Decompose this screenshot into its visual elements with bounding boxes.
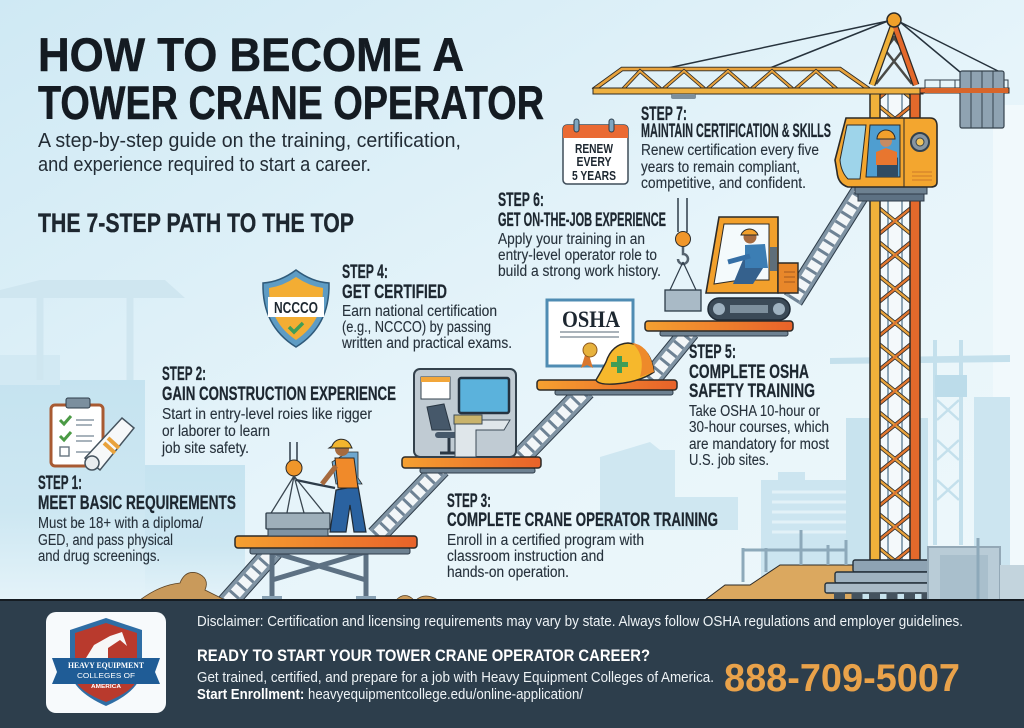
step 2 text: STEP 2:: [162, 364, 206, 385]
operator cab: [835, 118, 937, 201]
icon: calendar: RENEW: [575, 141, 614, 156]
step 6 text: GET ON-THE-JOB EXPERIENCE: [498, 210, 666, 231]
icon: NCCCO shield: NCCCO: [274, 300, 318, 317]
step 2 text: or laborer to learn: [162, 423, 270, 440]
excavator cab: [706, 217, 798, 320]
subtitle: and experience required to start a career.: [38, 154, 371, 176]
step 7 text: [641, 104, 831, 192]
enrollment link: Start Enrollment: heavyequipmentcollege.edu/online-application/: [197, 686, 584, 703]
step 1 text: Must be 18+ with a diploma/: [38, 515, 204, 532]
jib: [593, 69, 1009, 99]
step 2 text: GAIN CONSTRUCTION EXPERIENCE: [162, 384, 396, 405]
step 3 text: classroom instruction and: [447, 548, 604, 565]
step 5 text: U.S. job sites.: [689, 452, 769, 469]
dirt mounds: [140, 572, 438, 600]
step 2 text: job site safety.: [161, 440, 249, 457]
platform 3: [537, 380, 677, 395]
step 7 text: years to remain compliant,: [641, 159, 800, 176]
step 7 text: STEP 7:: [641, 104, 687, 125]
platform 2: [402, 457, 541, 473]
platform 4: [645, 321, 793, 336]
subtitle: [38, 130, 461, 176]
step 5 text: COMPLETE OSHA: [689, 362, 809, 383]
call to action text: Get trained, certified, and prepare for a job with Heavy Equipment Colleges of America.: [197, 669, 714, 686]
step 5 text: [689, 342, 830, 469]
step 7 text: competitive, and confident.: [641, 175, 806, 192]
title: [38, 28, 544, 129]
step 3 text: COMPLETE CRANE OPERATOR TRAINING: [447, 510, 718, 531]
step 7 text: Renew certification every five: [641, 142, 819, 159]
step 6 text: [498, 190, 666, 280]
worker with hook and load: [266, 439, 366, 536]
icon: hard hat: [596, 343, 654, 384]
step 6 text: STEP 6:: [498, 190, 544, 211]
logo: HEAVY EQUIPMENT: [68, 660, 144, 670]
hook and load: [665, 198, 701, 311]
mast: [870, 13, 920, 560]
phone number: 888-709-5007: [724, 657, 960, 700]
tower crane: [593, 13, 1024, 600]
step 6 text: build a strong work history.: [498, 263, 661, 280]
certificate: OSHA: [562, 307, 620, 332]
counterweight: [925, 71, 1008, 128]
icon: clipboard and diploma: [51, 398, 134, 470]
step 3 text: hands-on operation.: [447, 564, 569, 581]
logo: AMERICA: [91, 684, 121, 690]
step 5 text: 30-hour courses, which: [689, 419, 829, 436]
step 1 text: GED, and pass physical: [38, 532, 173, 549]
step 1 text: [38, 473, 236, 565]
logo: COLLEGES OF: [77, 673, 135, 680]
base: [705, 560, 1024, 600]
platform 1: [235, 536, 417, 602]
scaffold fence and buildings: [743, 530, 1024, 600]
footer panel: [0, 599, 1024, 728]
ladders: [226, 190, 862, 604]
step 4 text: Earn national certification: [342, 303, 497, 320]
icon: NCCCO shield: [263, 270, 329, 347]
step 1 text: and drug screenings.: [38, 548, 160, 565]
step 4 text: (e.g., NCCCO) by passing: [342, 319, 491, 336]
step 3 text: Enroll in a certified program with: [447, 532, 644, 549]
step 4 text: STEP 4:: [342, 262, 388, 283]
section heading: THE 7-STEP PATH TO THE TOP: [38, 208, 354, 238]
step 3 text: [447, 491, 718, 581]
cables: [668, 21, 1000, 72]
step 5 text: STEP 5:: [689, 342, 736, 363]
icon: calendar: EVERY: [576, 154, 612, 169]
icon: calendar: [563, 119, 628, 184]
icon: calendar: 5 YEARS: [572, 168, 616, 183]
step 5 text: Take OSHA 10-hour or: [689, 403, 820, 420]
step 4 text: [341, 262, 512, 352]
step 2 text: Start in entry-level roies like rigger: [162, 406, 372, 423]
step 1 text: MEET BASIC REQUIREMENTS: [38, 493, 236, 514]
title: HOW TO BECOME A: [38, 28, 464, 81]
title: TOWER CRANE OPERATOR: [38, 76, 544, 129]
step 1 text: STEP 1:: [38, 473, 82, 494]
logo: [46, 612, 166, 713]
call to action heading: READY TO START YOUR TOWER CRANE OPERATOR CAREER?: [197, 646, 650, 665]
step 6 text: Apply your training in an: [498, 231, 645, 248]
step 5 text: SAFETY TRAINING: [689, 381, 815, 402]
control room: [414, 369, 516, 457]
step 6 text: entry-level operator role to: [498, 247, 657, 264]
certificate: [547, 300, 633, 368]
subtitle: A step-by-step guide on the training, certification,: [38, 130, 461, 152]
step 4 text: written and practical exams.: [341, 335, 512, 352]
step 5 text: are mandatory for most: [689, 436, 830, 453]
step 3 text: STEP 3:: [447, 491, 491, 512]
step 4 text: GET CERTIFIED: [342, 282, 447, 303]
step 7 text: MAINTAIN CERTIFICATION & SKILLS: [641, 121, 831, 142]
step 2 text: [161, 364, 396, 457]
